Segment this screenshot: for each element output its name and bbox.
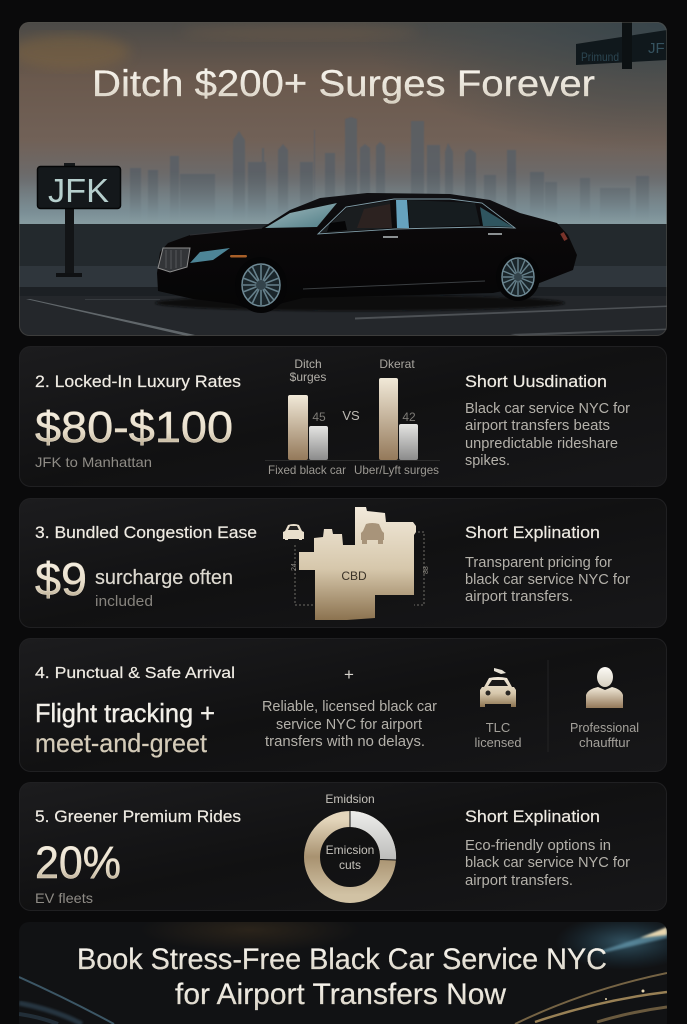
CBD map: CBD: [341, 569, 367, 583]
highlight: [35, 698, 215, 758]
chauffeur label: chaufftur: [579, 735, 631, 750]
explanation: unpredictable rideshare: [465, 435, 618, 452]
JFK sign: [38, 163, 120, 277]
panel: punctual and safe arrival: [20, 638, 666, 772]
bar chart: Dkerat: [379, 357, 415, 371]
CBD map: [283, 507, 430, 620]
donut chart: [312, 792, 396, 895]
JFK sign: JFK: [48, 172, 109, 209]
CBD map: 24: [291, 563, 298, 571]
icon: car on map: [361, 523, 384, 544]
center text: [262, 665, 437, 750]
skyline: [130, 117, 649, 202]
price: $80-$100: [35, 403, 233, 452]
hero title: Ditch $200+ Surges Forever: [92, 63, 595, 104]
TLC label: licensed: [474, 735, 522, 750]
bar chart: VS: [342, 408, 360, 423]
center text: +: [344, 665, 354, 684]
icon: chauffeur: [586, 667, 623, 708]
explanation: Short Explination: [465, 523, 600, 542]
surcharge stat: included: [95, 593, 153, 610]
donut chart: Emidsion: [325, 792, 375, 806]
explanation: airport transfers.: [465, 588, 573, 605]
TLC label: TLC: [486, 720, 510, 735]
panel: locked-in luxury rates: [20, 346, 666, 486]
CTA heading: [77, 943, 607, 1011]
CTA heading: for Airport Transfers Now: [175, 978, 506, 1011]
explanation: Short Explination: [465, 807, 600, 826]
highlight: meet-and-greet: [35, 728, 208, 758]
heading: 2. Locked-In Luxury Rates: [35, 372, 241, 391]
bar chart: Ditch: [294, 357, 322, 371]
bar chart: Fixed black car: [268, 463, 346, 477]
bar chart: Uber/Lyft surges: [354, 463, 439, 477]
bar chart: 42: [402, 410, 416, 424]
explanation: [465, 372, 630, 469]
center text: Reliable, licensed black car: [262, 699, 437, 715]
CBD map: 88: [423, 566, 430, 574]
road markings: [26, 299, 667, 336]
street sign: JF: [648, 40, 665, 57]
panel: call to action: [19, 922, 667, 1024]
heading: 3. Bundled Congestion Ease: [35, 523, 257, 542]
center text: service NYC for airport: [276, 717, 422, 733]
explanation: airport transfers beats: [465, 417, 610, 434]
explanation: black car service NYC for: [465, 854, 630, 871]
panel: greener premium rides: [20, 782, 666, 910]
wheels: [235, 253, 540, 313]
bar chart: $urges: [290, 370, 326, 384]
chauffeur label: Professional: [570, 720, 639, 735]
wall: [19, 224, 667, 266]
explanation: airport transfers.: [465, 872, 573, 889]
EV label: EV fleets: [35, 890, 93, 906]
surcharge stat: surcharge often: [95, 567, 233, 589]
bar chart: 45: [312, 410, 326, 424]
panel: bundled congestion ease: [20, 498, 666, 628]
percent stat: 20%: [35, 837, 121, 888]
CTA heading: Book Stress-Free Black Car Service NYC: [77, 943, 607, 976]
donut chart: Emicsion: [326, 843, 374, 857]
surcharge stat: [35, 553, 233, 610]
heading: 5. Greener Premium Rides: [35, 807, 241, 826]
heading: 4. Punctual & Safe Arrival: [35, 665, 235, 682]
explanation: spikes.: [465, 452, 510, 469]
street sign: [576, 22, 667, 69]
explanation: Black car service NYC for: [465, 400, 630, 417]
route label: JFK to Manhattan: [35, 454, 152, 470]
bar chart: [265, 357, 440, 477]
highlight: Flight tracking +: [35, 698, 215, 728]
explanation: Short Uusdination: [465, 372, 607, 391]
center text: transfers with no delays.: [265, 734, 425, 750]
panel: hero: [10, 22, 667, 336]
limousine: [155, 193, 577, 313]
surcharge stat: $9: [35, 553, 87, 605]
TLC label: [474, 720, 522, 750]
explanation: black car service NYC for: [465, 571, 630, 588]
icon: TLC car: [480, 668, 516, 707]
explanation: [465, 523, 630, 605]
explanation: Eco-friendly options in: [465, 837, 611, 854]
light trails: [19, 973, 667, 1024]
explanation: Transparent pricing for: [465, 554, 612, 571]
explanation: [465, 807, 630, 889]
street sign: Primund: [581, 50, 619, 64]
donut chart: cuts: [339, 858, 361, 872]
chauffeur label: [570, 720, 639, 750]
icon: car: [283, 524, 304, 540]
